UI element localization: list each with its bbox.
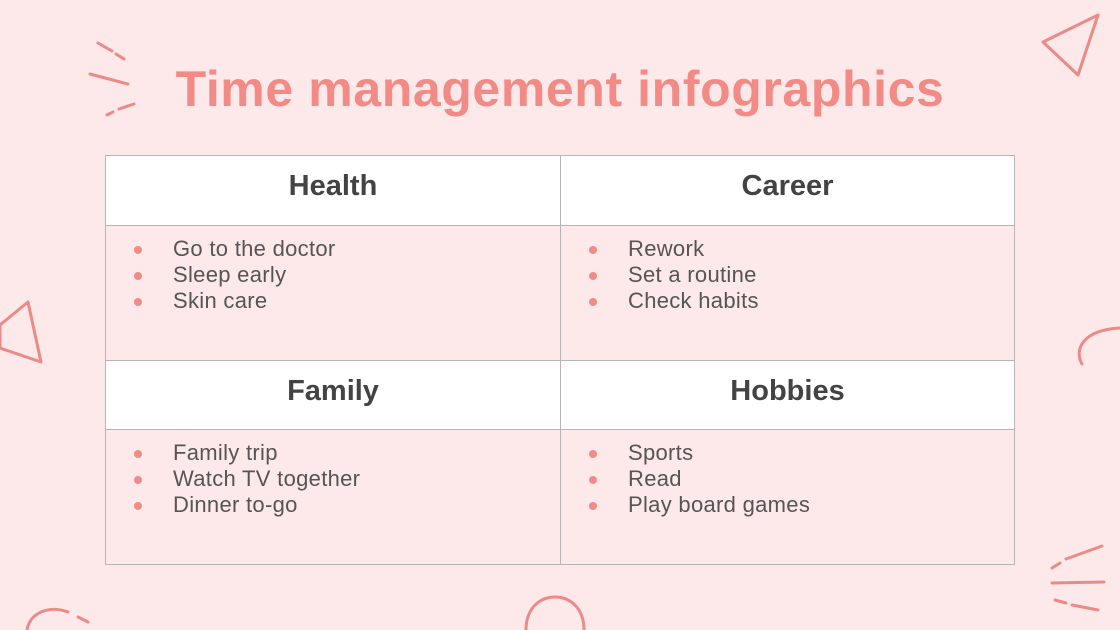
title: Time management infographics [176, 61, 944, 117]
list: Health [106, 226, 561, 361]
list: Career: Rework [628, 236, 704, 261]
list: Health: Sleep early [173, 262, 286, 287]
table [105, 155, 1015, 565]
header: Career: Career [742, 170, 833, 202]
header: Family [106, 360, 561, 430]
list: Hobbies: Sports [628, 440, 693, 465]
header: Career [561, 156, 1014, 226]
list: Health: Go to the doctor [173, 236, 336, 261]
header: Hobbies: Hobbies [730, 375, 845, 407]
list: Health: Skin care [173, 288, 267, 313]
list: Family: Family trip [173, 440, 278, 465]
header: Hobbies [561, 360, 1014, 430]
list: Family: Watch TV together [173, 466, 360, 491]
list: Hobbies [589, 440, 810, 517]
list: Family [106, 430, 561, 565]
list: Career [589, 236, 759, 313]
list: Career: Check habits [628, 288, 759, 313]
list: Career: Set a routine [628, 262, 757, 287]
list: Family: Dinner to-go [173, 492, 298, 517]
header: Health [106, 156, 561, 226]
list: Hobbies: Read [628, 466, 682, 491]
list: Hobbies: Play board games [628, 492, 810, 517]
header: Family: Family [287, 375, 379, 407]
header: Health: Health [289, 170, 377, 202]
